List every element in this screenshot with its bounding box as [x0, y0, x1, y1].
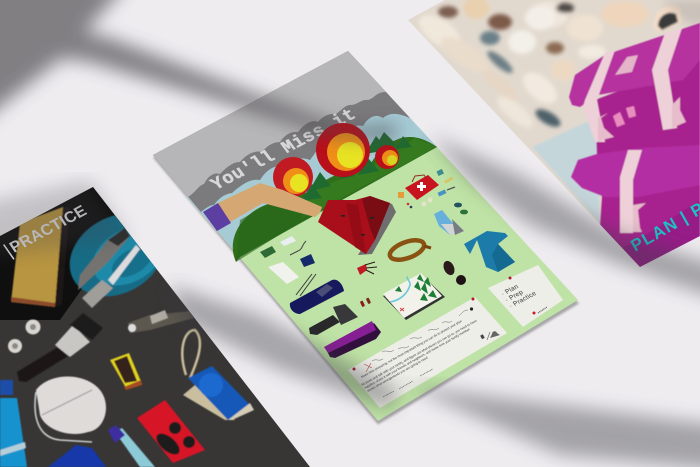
small supplies [398, 169, 468, 214]
fire large [316, 123, 370, 177]
straps [583, 28, 682, 233]
map [383, 273, 445, 320]
dark smoke cloud [153, 51, 410, 212]
fire medium [273, 157, 313, 197]
flashlight [309, 304, 358, 335]
checklist: · Plan [500, 283, 520, 298]
label patch [615, 55, 638, 75]
sky [187, 92, 437, 257]
note: instructions [348, 297, 507, 408]
sleeping pad [324, 321, 381, 358]
boots [441, 259, 466, 285]
poster: practice (left) [0, 180, 320, 467]
note: plan prep practice [488, 265, 563, 327]
batteries [8, 320, 40, 353]
checklist [500, 283, 538, 310]
dust mask [35, 376, 106, 442]
water bag [0, 380, 27, 467]
arm [218, 183, 322, 222]
knife and fork [78, 228, 140, 308]
blue pouch [48, 445, 106, 467]
checklist: · Prep [504, 289, 525, 304]
book [11, 207, 70, 307]
checklist: · Practice [508, 290, 538, 310]
batteries pair [360, 297, 371, 307]
first aid kit [405, 175, 439, 200]
body copy: supplies, share it with your friends and neighbors, and make sure your family member [363, 327, 472, 390]
carabiner and tool [128, 310, 194, 333]
cable [290, 241, 306, 255]
poster: plan (right) [400, 0, 700, 270]
rope coil [387, 236, 431, 264]
fire small [375, 145, 399, 169]
body copy: Sit down and talk with your family, and figure out what places you can go to, you need to have [360, 319, 478, 387]
poster: you'll miss it (center) [153, 51, 578, 421]
light sky band [153, 51, 386, 197]
red radio [137, 400, 205, 463]
heading: practice: PRACTICE [7, 203, 90, 256]
body copy: Make time preparing, not the most important thing you can do to protect your plan [360, 319, 463, 379]
lower flap [571, 145, 700, 197]
strap [182, 330, 200, 378]
trees [301, 132, 412, 201]
backpack body [595, 60, 700, 268]
water bottle [434, 210, 464, 235]
zip pulls [613, 106, 636, 127]
crank device [183, 366, 254, 420]
signature icons [480, 331, 500, 340]
id card [280, 236, 296, 246]
paper checklist [268, 262, 299, 284]
buckles [598, 97, 686, 232]
title: You'll Miss it [208, 105, 361, 195]
t-shirt [464, 231, 515, 272]
fires [273, 123, 399, 197]
bowl [69, 214, 157, 297]
water filter [108, 425, 155, 467]
cash [260, 246, 276, 258]
mug [654, 6, 682, 32]
sleeve [203, 203, 231, 231]
tent bag [290, 274, 344, 314]
matchbox [110, 353, 142, 390]
top flap [569, 23, 700, 107]
hills [233, 137, 437, 262]
poster shadow [153, 54, 579, 424]
lower pocket [618, 200, 700, 267]
body copy: knows what arrangements you are going to need [366, 356, 429, 393]
red backpack [318, 196, 396, 255]
knife tool [357, 262, 377, 275]
flashlight [17, 313, 103, 382]
power card [300, 254, 315, 267]
ice [532, 121, 600, 222]
